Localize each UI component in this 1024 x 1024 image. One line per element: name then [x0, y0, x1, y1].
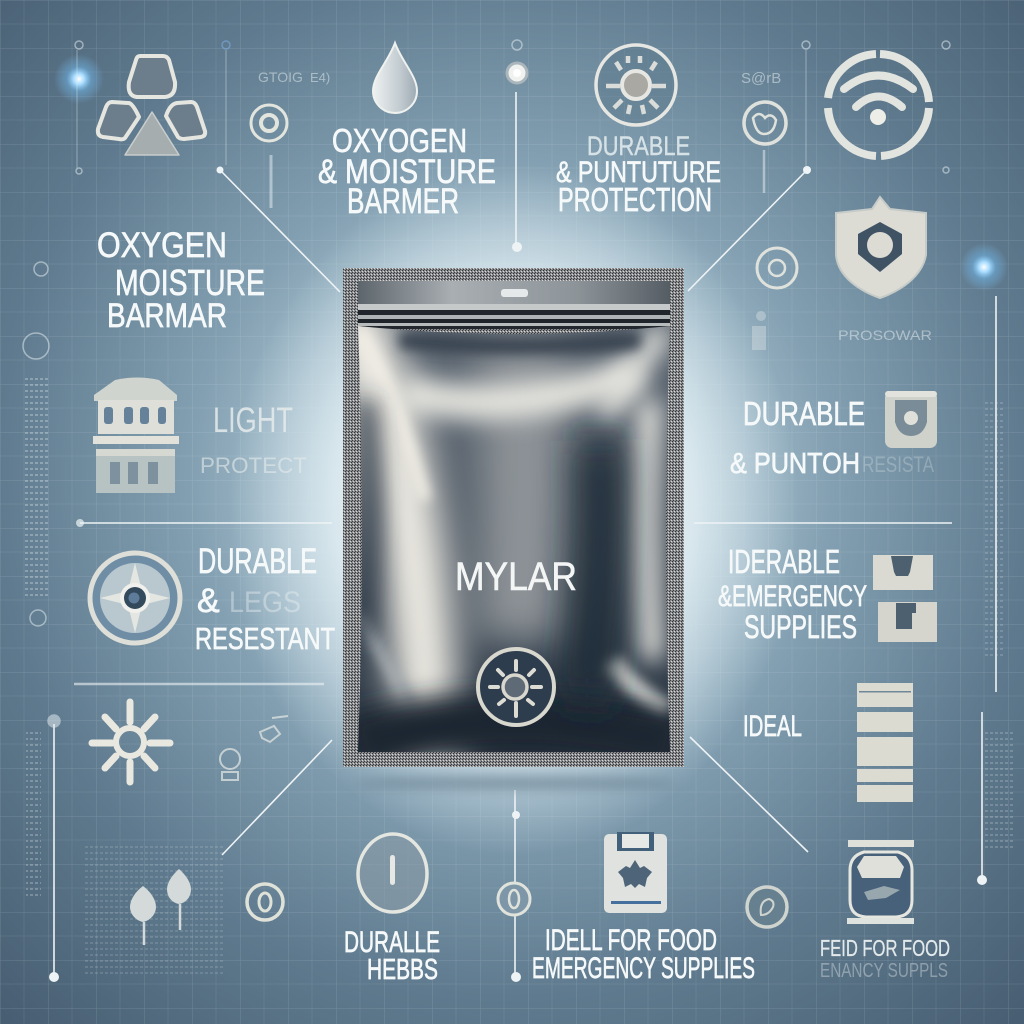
- text block: light protect: [200, 401, 307, 478]
- icon: building: [93, 378, 179, 493]
- text block: emergency supplies right: &EMERGENCY: [718, 580, 867, 613]
- text block: durable herbs: DURALLE: [344, 926, 440, 959]
- text block: ideal for food: [532, 924, 755, 985]
- icon: water drop: [373, 43, 417, 113]
- text block: emergency supplies right: [718, 543, 867, 645]
- text block: durable and leak resistant: &: [197, 582, 220, 620]
- mylar pouch: [340, 268, 684, 780]
- text block: durable and puncture right: DURABLE: [743, 395, 865, 432]
- shadow under pouch: [355, 777, 675, 789]
- text block: durable and puncture right: & PUNTOH: [730, 448, 860, 480]
- text block: feed for food: ENANCY SUPPLS: [820, 960, 948, 982]
- icon: ring bottom left: [247, 884, 283, 920]
- icon: striped list: [857, 683, 913, 802]
- text block: durable and puncture protection: PROTECTION: [558, 181, 712, 218]
- pouch seal: [358, 281, 670, 329]
- text block: durable and puncture right: [730, 395, 934, 480]
- icon: gear arrows: [92, 702, 170, 782]
- icon: small glyph left: [220, 716, 288, 780]
- text block: oxygen moisture barrier left: [97, 226, 265, 335]
- icon: shield: [836, 197, 926, 298]
- icon: oval seed: [358, 834, 427, 912]
- text block: ideal for food: IDELL FOR FOOD: [545, 924, 717, 957]
- text block: emergency supplies right: SUPPLIES: [744, 609, 857, 645]
- icon: ring bottom center: [498, 883, 530, 915]
- icon: jar: [847, 840, 914, 924]
- faint labels: GTOIG: [258, 69, 303, 85]
- text block: emergency supplies right: IDERABLE: [728, 543, 840, 580]
- icon: herb leaves: [130, 869, 191, 945]
- text block: light protect: PROTECT: [200, 453, 307, 478]
- icon: ring right mid: [757, 248, 797, 288]
- icon: cup badge: [885, 391, 937, 448]
- text block: feed for food: [820, 935, 950, 982]
- icon: ring bottom right: [747, 887, 787, 927]
- glow: left light: [54, 54, 104, 104]
- text block: oxygen and moisture barrier top: & MOISTURE: [318, 153, 496, 191]
- text block: oxygen moisture barrier left: MOISTURE: [115, 262, 265, 303]
- text block: ideal for food: EMERGENCY SUPPLIES: [532, 952, 755, 985]
- faint data columns: [25, 375, 1015, 977]
- text block: light protect: LIGHT: [213, 401, 293, 440]
- faint labels: E4): [310, 70, 330, 85]
- faint labels: [258, 69, 932, 343]
- icon: faint figure right: [752, 311, 766, 350]
- faint labels: PROSOWAR: [838, 327, 932, 343]
- icon: compass dial: [90, 553, 180, 643]
- faint labels: S@rB: [741, 70, 781, 87]
- glow: right light: [960, 243, 1008, 291]
- text block: durable and leak resistant: [195, 542, 335, 656]
- pouch label: MYLAR: [455, 555, 577, 599]
- icon: boxes: [873, 555, 937, 642]
- text block: oxygen moisture barrier left: BARMAR: [107, 297, 227, 335]
- pouch icon: [478, 649, 554, 725]
- faint guide lines and markers: [23, 40, 950, 727]
- text block: oxygen and moisture barrier top: BARMER: [347, 182, 459, 221]
- text block: durable and puncture right: RESISTA: [862, 452, 934, 477]
- text block: durable and puncture protection: DURABLE: [587, 131, 690, 161]
- text block: durable and puncture protection: & PUNTUTURE: [556, 156, 721, 189]
- icon: food package: [604, 832, 667, 913]
- pouch frame: [343, 268, 684, 767]
- text block: oxygen and moisture barrier top: [318, 122, 496, 221]
- icon: triangle cluster: [98, 56, 205, 155]
- icon: pin marker: [507, 63, 527, 83]
- icon: sun circle: [596, 45, 676, 125]
- icon: small ring right top: [744, 102, 786, 144]
- text block: oxygen moisture barrier left: OXYGEN: [97, 226, 227, 265]
- text block: durable herbs: [344, 926, 440, 986]
- pouch body: [358, 326, 670, 752]
- text block: durable and leak resistant: DURABLE: [198, 542, 317, 581]
- text block: ideal: IDEAL: [743, 710, 802, 743]
- text block: oxygen and moisture barrier top: OXYOGEN: [332, 122, 467, 159]
- text block: feed for food: FEID FOR FOOD: [820, 935, 950, 961]
- text block: durable and leak resistant: RESESTANT: [195, 621, 335, 656]
- text block: durable and puncture protection: [556, 131, 721, 218]
- icon: wifi ring: [828, 54, 929, 156]
- text block: durable herbs: HEBBS: [367, 954, 438, 986]
- icon: small ring left: [251, 105, 287, 141]
- text block: durable and leak resistant: LEGS: [229, 586, 301, 619]
